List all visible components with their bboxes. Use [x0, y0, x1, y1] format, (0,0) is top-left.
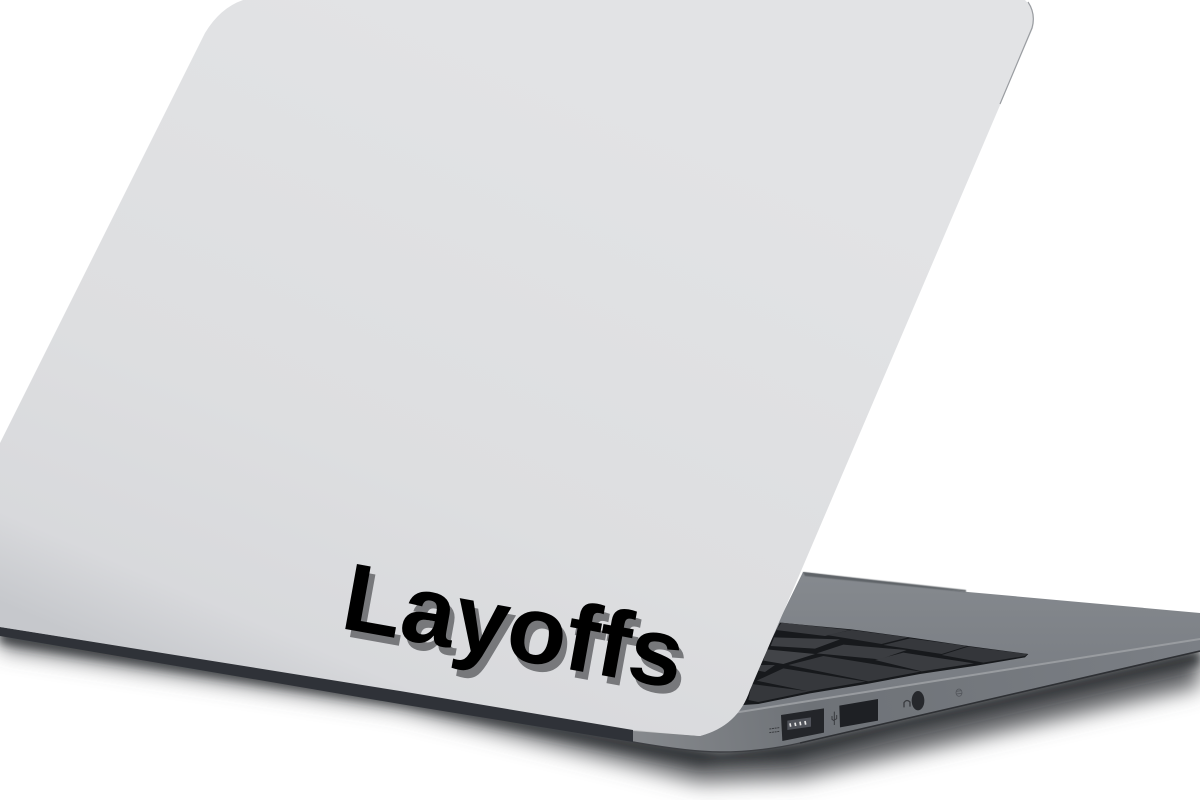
keyboard keys — [743, 623, 1028, 741]
keyboard deck — [735, 572, 1200, 715]
sticker text: Layoffs: Layoffs — [335, 543, 693, 710]
base lower edge — [800, 651, 1200, 743]
deck upper rim — [803, 572, 966, 592]
laptop lid — [0, 0, 1034, 736]
icon: power symbol — [769, 728, 779, 733]
base front face — [633, 640, 1200, 752]
laptop hinge strip — [0, 627, 633, 742]
ground shadow — [0, 628, 1200, 782]
icon: indicator — [956, 689, 962, 696]
front edge highlight — [733, 638, 1200, 715]
icon: usb symbol — [832, 712, 837, 725]
port: audio jack — [912, 691, 924, 710]
sticker text: Layoffs: Layoffs — [340, 551, 697, 717]
laptop base — [633, 572, 1200, 752]
port: USB-A — [839, 699, 878, 727]
lid right edge shade — [1000, 2, 1033, 104]
port: USB-C style — [781, 708, 824, 741]
icon: headphones — [904, 700, 910, 707]
